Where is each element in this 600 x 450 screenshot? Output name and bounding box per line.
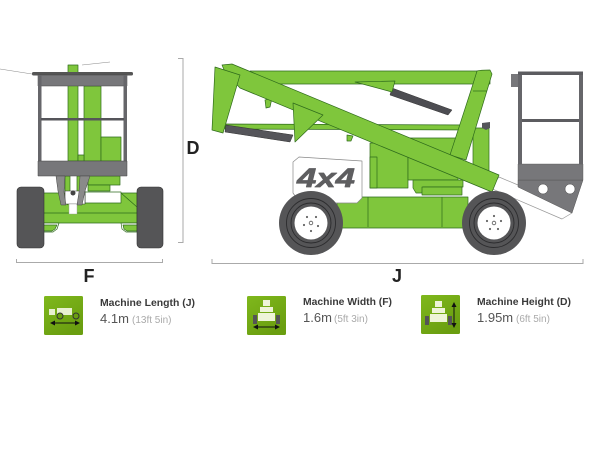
text: machine length: (13ft 5in) <box>132 315 171 326</box>
lower left cylinder <box>225 125 293 142</box>
dimension J: J <box>392 266 402 286</box>
4x4 panel <box>293 157 362 203</box>
text: machine length <box>100 297 195 326</box>
front basket <box>0 62 133 176</box>
mid triangle <box>293 103 323 142</box>
text: machine length: 4.1m <box>100 311 129 326</box>
dimension F <box>16 259 162 286</box>
dimension D <box>178 58 200 242</box>
icon: machine height <box>421 295 460 334</box>
left link <box>212 67 240 133</box>
text: machine width <box>303 296 392 325</box>
hinge cap <box>482 122 490 130</box>
upper right cylinder <box>390 88 452 115</box>
front view of machine <box>0 62 163 248</box>
upper horizontal arm <box>250 71 490 84</box>
text: machine height <box>477 296 571 325</box>
rear basket platform wedge <box>490 177 572 219</box>
text: machine width: 1.6m <box>303 310 332 325</box>
icon: machine length <box>44 296 83 335</box>
dimension F: F <box>84 266 94 286</box>
text: machine width: Machine Width (F) <box>303 296 392 308</box>
dimension D: D <box>186 138 200 158</box>
icon: machine width <box>247 296 286 335</box>
lower link rod <box>225 124 472 130</box>
front steering arms <box>56 176 90 214</box>
right wheel <box>462 191 526 255</box>
text: machine width: (5ft 3in) <box>334 314 368 325</box>
dimension J <box>212 259 583 286</box>
upper bracket <box>355 81 395 92</box>
front wheels <box>17 187 163 248</box>
text: machine height: (6ft 5in) <box>516 314 550 325</box>
4x4 panel: 4x4 <box>296 163 355 193</box>
upright arm <box>450 70 492 160</box>
text: machine height: Machine Height (D) <box>477 296 571 308</box>
rear basket <box>511 72 583 213</box>
small lugs <box>265 98 353 141</box>
text: machine height: 1.95m <box>477 310 513 325</box>
left wheel <box>279 191 343 255</box>
side view of machine <box>212 64 583 255</box>
front chassis <box>43 192 137 232</box>
green columns <box>65 65 121 192</box>
side body and chassis <box>337 128 489 228</box>
main diagonal boom <box>222 64 499 192</box>
text: machine length: Machine Length (J) <box>100 297 195 309</box>
